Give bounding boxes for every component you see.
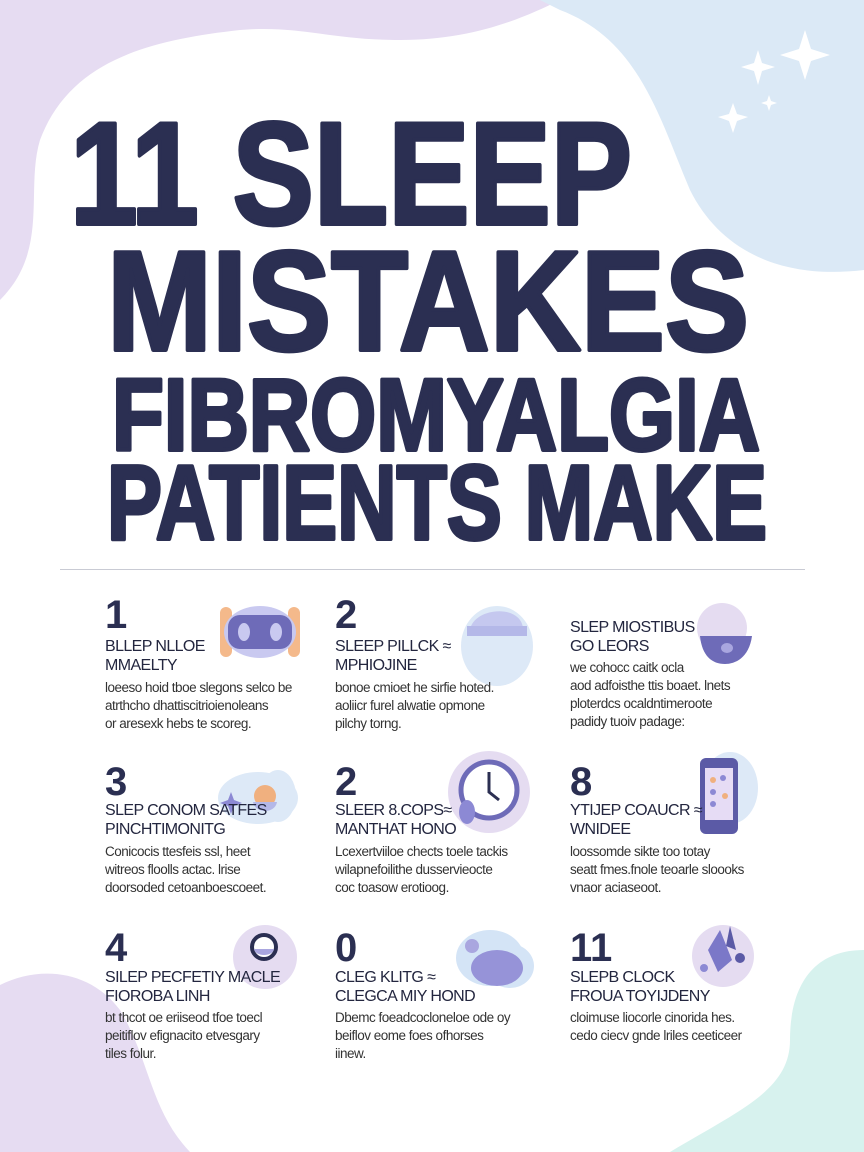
item 7: tiles folur.: [105, 1046, 156, 1061]
item 2: pilchy torng.: [335, 716, 401, 731]
item 8: iinew.: [335, 1046, 366, 1061]
item 8: [335, 926, 511, 1061]
item 7: bt thcot oe eriiseod tfoe toecl: [105, 1010, 262, 1025]
item 5: MANTHAT HONO: [335, 821, 456, 838]
item 9: cloimuse liocorle cinorida hes.: [570, 1010, 735, 1025]
item 3: ploterdcs ocaldntimeroote: [570, 696, 712, 711]
item 2: 2: [335, 593, 357, 637]
item 9: cedo ciecv gnde lriles ceeticeer: [570, 1028, 742, 1043]
item 6: seatt fmes.fnole teoarle sloooks: [570, 862, 744, 877]
item 1: or aresexk hebs te scoreg.: [105, 716, 251, 731]
item 2: [335, 593, 494, 731]
item 7: SILEP PECFETIY MACLE: [105, 969, 280, 986]
item 5: [335, 760, 508, 895]
icon: clock: [448, 751, 530, 833]
item 6: vnaor aciaseoot.: [570, 880, 661, 895]
icon: bowl: [697, 603, 752, 664]
item 5: coc toasow erotioog.: [335, 880, 449, 895]
item 6: 8: [570, 760, 592, 804]
item 4: 3: [105, 760, 127, 804]
icon: sparkles: [718, 30, 830, 132]
item 3: [570, 619, 730, 729]
item 9: FROUA TOYIJDENY: [570, 988, 710, 1005]
item 3: aod adfoisthe ttis boaet. lnets: [570, 678, 730, 693]
item 8: CLEGCA MIY HOND: [335, 988, 475, 1005]
item 1: BLLEP NLLOE: [105, 638, 205, 655]
item 2: MPHIOJINE: [335, 657, 417, 674]
item 1: [105, 593, 292, 731]
item 2: SLEEP PILLCK ≈: [335, 638, 451, 655]
item 9: SLEPB CLOCK: [570, 969, 675, 986]
item 7: peitiflov efignacito etvesgary: [105, 1028, 260, 1043]
icon: heart: [218, 770, 298, 824]
item 3: GO LEORS: [570, 638, 649, 655]
icon: mask: [220, 606, 300, 658]
icon: cloud sleep: [456, 930, 534, 988]
item 9: [570, 926, 742, 1043]
item 7: [105, 926, 280, 1061]
item 6: [570, 760, 744, 895]
item 4: SLEP CONOM SATFES: [105, 802, 267, 819]
icon: phone: [700, 752, 758, 834]
item 8: beiflov eome foes ofhorses: [335, 1028, 483, 1043]
item 5: SLEER 8.COPS≈: [335, 802, 452, 819]
item 5: 2: [335, 760, 357, 804]
icon: moon circle: [233, 925, 297, 989]
item 6: loossomde sikte too totay: [570, 844, 710, 859]
item 3: we cohocc caitk ocla: [570, 660, 684, 675]
item 4: Conicocis ttesfeis ssl, heet: [105, 844, 250, 859]
item 1: 1: [105, 593, 127, 637]
item 7: FIOROBA LINH: [105, 988, 210, 1005]
item 1: MMAELTY: [105, 657, 177, 674]
item 3: padidy tuoiv padage:: [570, 714, 685, 729]
item 6: YTIJEP COAUCR ≈: [570, 802, 702, 819]
item 5: wilapnefoilithe dusservieocte: [335, 862, 492, 877]
icon: leaves: [692, 925, 754, 987]
item 7: 4: [105, 926, 127, 970]
item 4: PINCHTIMONITG: [105, 821, 225, 838]
item 1: loeeso hoid tboe slegons selco be: [105, 680, 292, 695]
item 8: CLEG KLITG ≈: [335, 969, 435, 986]
item 5: Lcexertviiloe chects toele tackis: [335, 844, 508, 859]
item 1: atrthcho dhattiscitrioienoleans: [105, 698, 268, 713]
item 3: SLEP MIOSTIBUS: [570, 619, 695, 636]
title: MISTAKES: [107, 222, 749, 381]
title: [70, 100, 767, 550]
item 9: 11: [570, 926, 612, 970]
item 8: 0: [335, 926, 357, 970]
icon: cloud: [461, 606, 533, 686]
item 6: WNIDEE: [570, 821, 630, 838]
item 2: bonoe cmioet he sirfie hoted.: [335, 680, 494, 695]
item 4: [105, 760, 267, 895]
item 4: witreos floolls actac. lrise: [105, 862, 240, 877]
item 4: doorsoded cetoanboescoeet.: [105, 880, 266, 895]
item 8: Dbemc foeadcocloneloe ode oy: [335, 1010, 510, 1025]
item 2: aoliicr furel alwatie opmone: [335, 698, 485, 713]
